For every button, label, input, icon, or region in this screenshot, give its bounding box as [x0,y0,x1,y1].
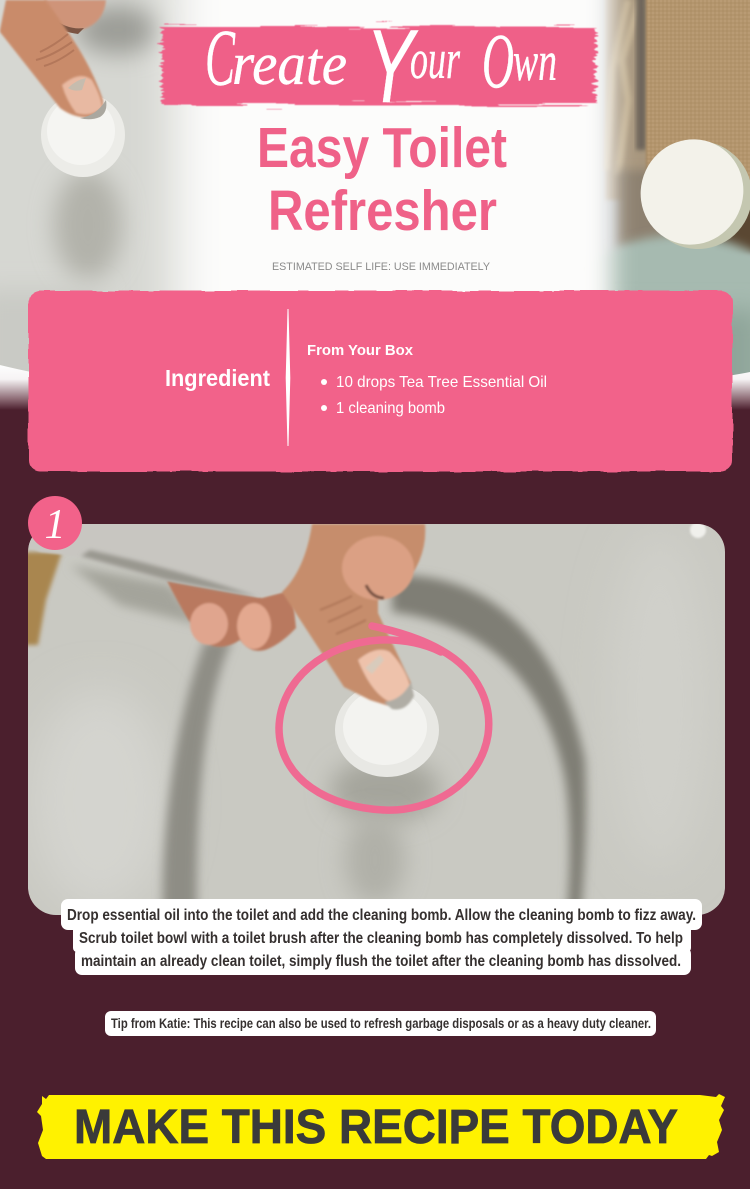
hand [282,524,425,709]
top-right highlight [690,522,706,538]
script title: O [482,17,514,104]
index finger [0,0,103,118]
ingredient list: 10 drops Tea Tree Essential Oil [336,374,547,391]
script title: reate [232,31,347,97]
tablet [41,93,125,177]
panel: ingredients [28,290,732,472]
divider [286,309,290,446]
water shadow [330,758,440,822]
step 1 photo [20,522,725,925]
sleeve shadow [70,565,200,625]
sleeve [28,538,260,598]
header photo collage [0,0,750,376]
toilet rim: left limb [163,640,232,925]
script title: wn [513,31,557,93]
recipe name heading: Easy Toilet [257,116,507,180]
ingredient list: 1 cleaning bomb [336,400,445,417]
header white background with fade to maroon [0,0,750,410]
recipe name heading: Refresher [268,179,497,243]
highlight circle [279,626,489,810]
tablet [335,683,439,777]
tip callout [105,1011,656,1036]
script title [205,9,557,125]
tablet [665,142,750,249]
script title: our [410,29,460,91]
title brush banner [162,9,596,125]
ingredient list [321,374,547,417]
photo: burlap bag with tablet [597,0,750,376]
toilet rim: right limb [392,575,586,925]
step number badge [28,496,82,550]
photo: toilet with hand and tablet [0,0,194,372]
fingers [167,581,296,651]
from your box heading: From Your Box [307,342,414,359]
shelf life note: ESTIMATED SELF LIFE: USE IMMEDIATELY [272,261,491,273]
recipe name heading [257,116,507,243]
rope strands [608,0,637,172]
thumb [44,0,106,30]
instruction text [61,899,702,975]
ingredient label: Ingredient [165,365,270,391]
script title: Y [366,9,419,125]
wall strip [20,552,62,645]
step number badge: 1 [44,502,66,548]
call to action banner: MAKE THIS RECIPE TODAY [74,1101,678,1154]
script title: C [205,15,236,103]
